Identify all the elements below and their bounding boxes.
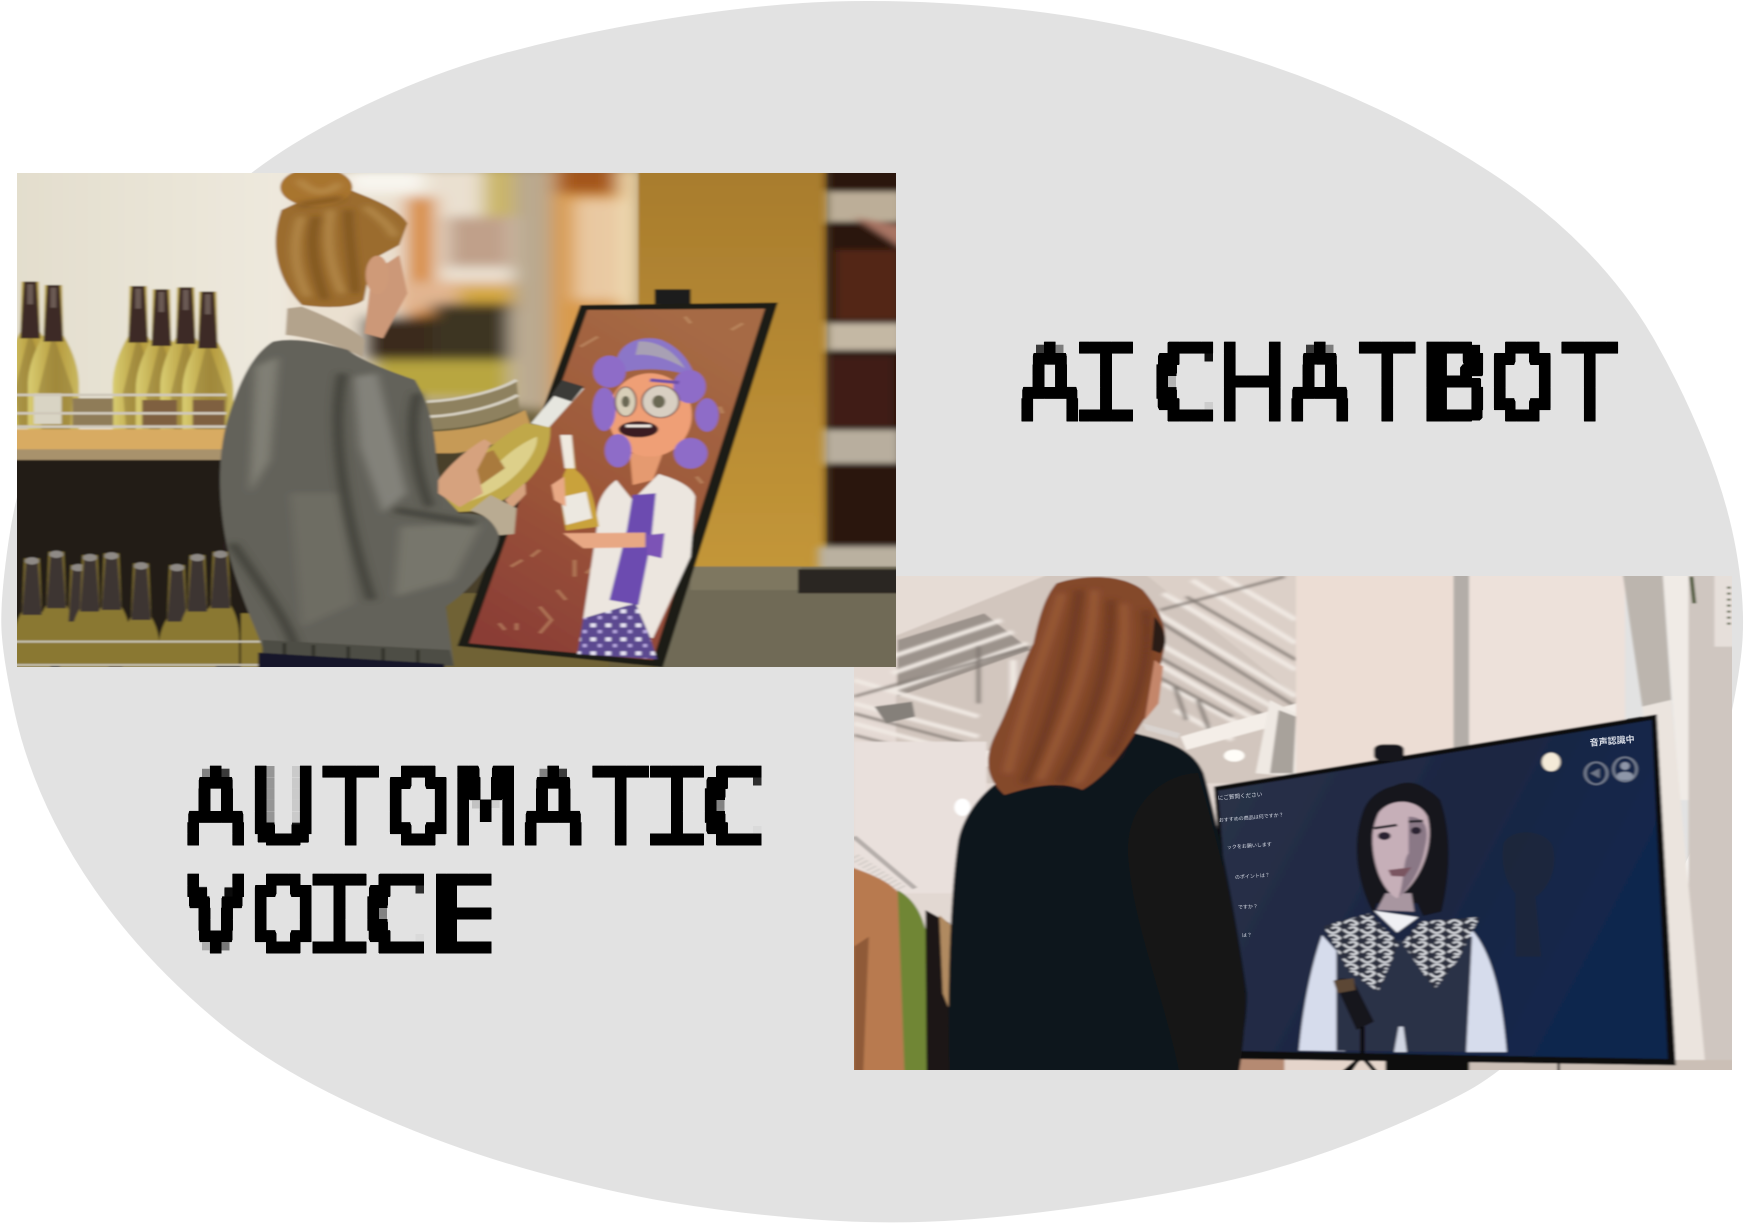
hands and cuff xyxy=(438,439,526,535)
faint reflection xyxy=(1503,832,1554,957)
bottle held by woman xyxy=(444,380,584,512)
on-screen Japanese UI text: にご質問ください xyxy=(1217,790,1263,802)
lower left bottles xyxy=(17,550,608,667)
on-screen Japanese UI text: 音声認識中 xyxy=(1589,733,1635,748)
curved shelf right of woman xyxy=(424,378,532,594)
on-screen Japanese UI text: は？ xyxy=(1242,932,1252,939)
screen icons xyxy=(1585,757,1637,784)
avatar collar xyxy=(1324,911,1480,992)
floor xyxy=(656,566,896,667)
avatar hair back xyxy=(1357,785,1449,916)
TV screen with avatar xyxy=(1214,714,1676,1077)
bomber jacket xyxy=(220,340,499,666)
microphone xyxy=(1334,978,1377,1073)
white columns xyxy=(1296,570,1740,1073)
photo: woman facing screen with digital avatar in clothing store xyxy=(840,570,1743,1077)
upper left bottles xyxy=(5,282,233,438)
collar of shirt xyxy=(1144,724,1180,738)
character's head xyxy=(608,373,692,457)
screen glow xyxy=(1542,753,1560,771)
woman's dark jacket xyxy=(949,732,1247,1077)
woman's hair and head xyxy=(276,168,407,357)
on-screen Japanese UI text: おすすめの商品は何ですか？ xyxy=(1219,811,1284,824)
on-screen Japanese UI text: ックをお願いします xyxy=(1227,841,1272,851)
photo: woman holding wine bottle in front of cartoon avatar screen xyxy=(0,160,914,678)
amber pillar xyxy=(638,167,827,568)
rail and shelf xyxy=(17,392,250,667)
cream wall xyxy=(17,173,304,430)
digital display xyxy=(457,289,778,667)
avatar face xyxy=(1372,802,1430,898)
store ceiling and walls xyxy=(854,576,1298,929)
heading: automatic voice: AUTOMATIC xyxy=(183,746,766,871)
on-screen Japanese UI text: ですか？ xyxy=(1238,903,1258,911)
heading: AI chatbot: AI CHATBOT xyxy=(1017,322,1622,447)
avatar neck xyxy=(1377,893,1414,912)
cartoon character xyxy=(551,338,719,659)
hair front xyxy=(1370,782,1424,830)
character's bottle xyxy=(561,450,600,532)
dark wine shelves on right xyxy=(812,173,896,568)
avatar vest xyxy=(1336,937,1472,1052)
on-screen Japanese UI text xyxy=(1217,733,1635,939)
heading: automatic voice xyxy=(183,746,766,979)
avatar sleeves xyxy=(1299,935,1351,1051)
on-screen Japanese UI text: のポイントは？ xyxy=(1235,872,1270,881)
blurred bookshelves xyxy=(293,173,640,417)
wall below screen xyxy=(1236,1058,1732,1070)
woman in grey bomber jacket xyxy=(220,168,584,673)
woman's auburn hair xyxy=(988,577,1165,795)
clothes rack xyxy=(854,836,954,1070)
heading: automatic voice: VOICE xyxy=(183,854,496,979)
